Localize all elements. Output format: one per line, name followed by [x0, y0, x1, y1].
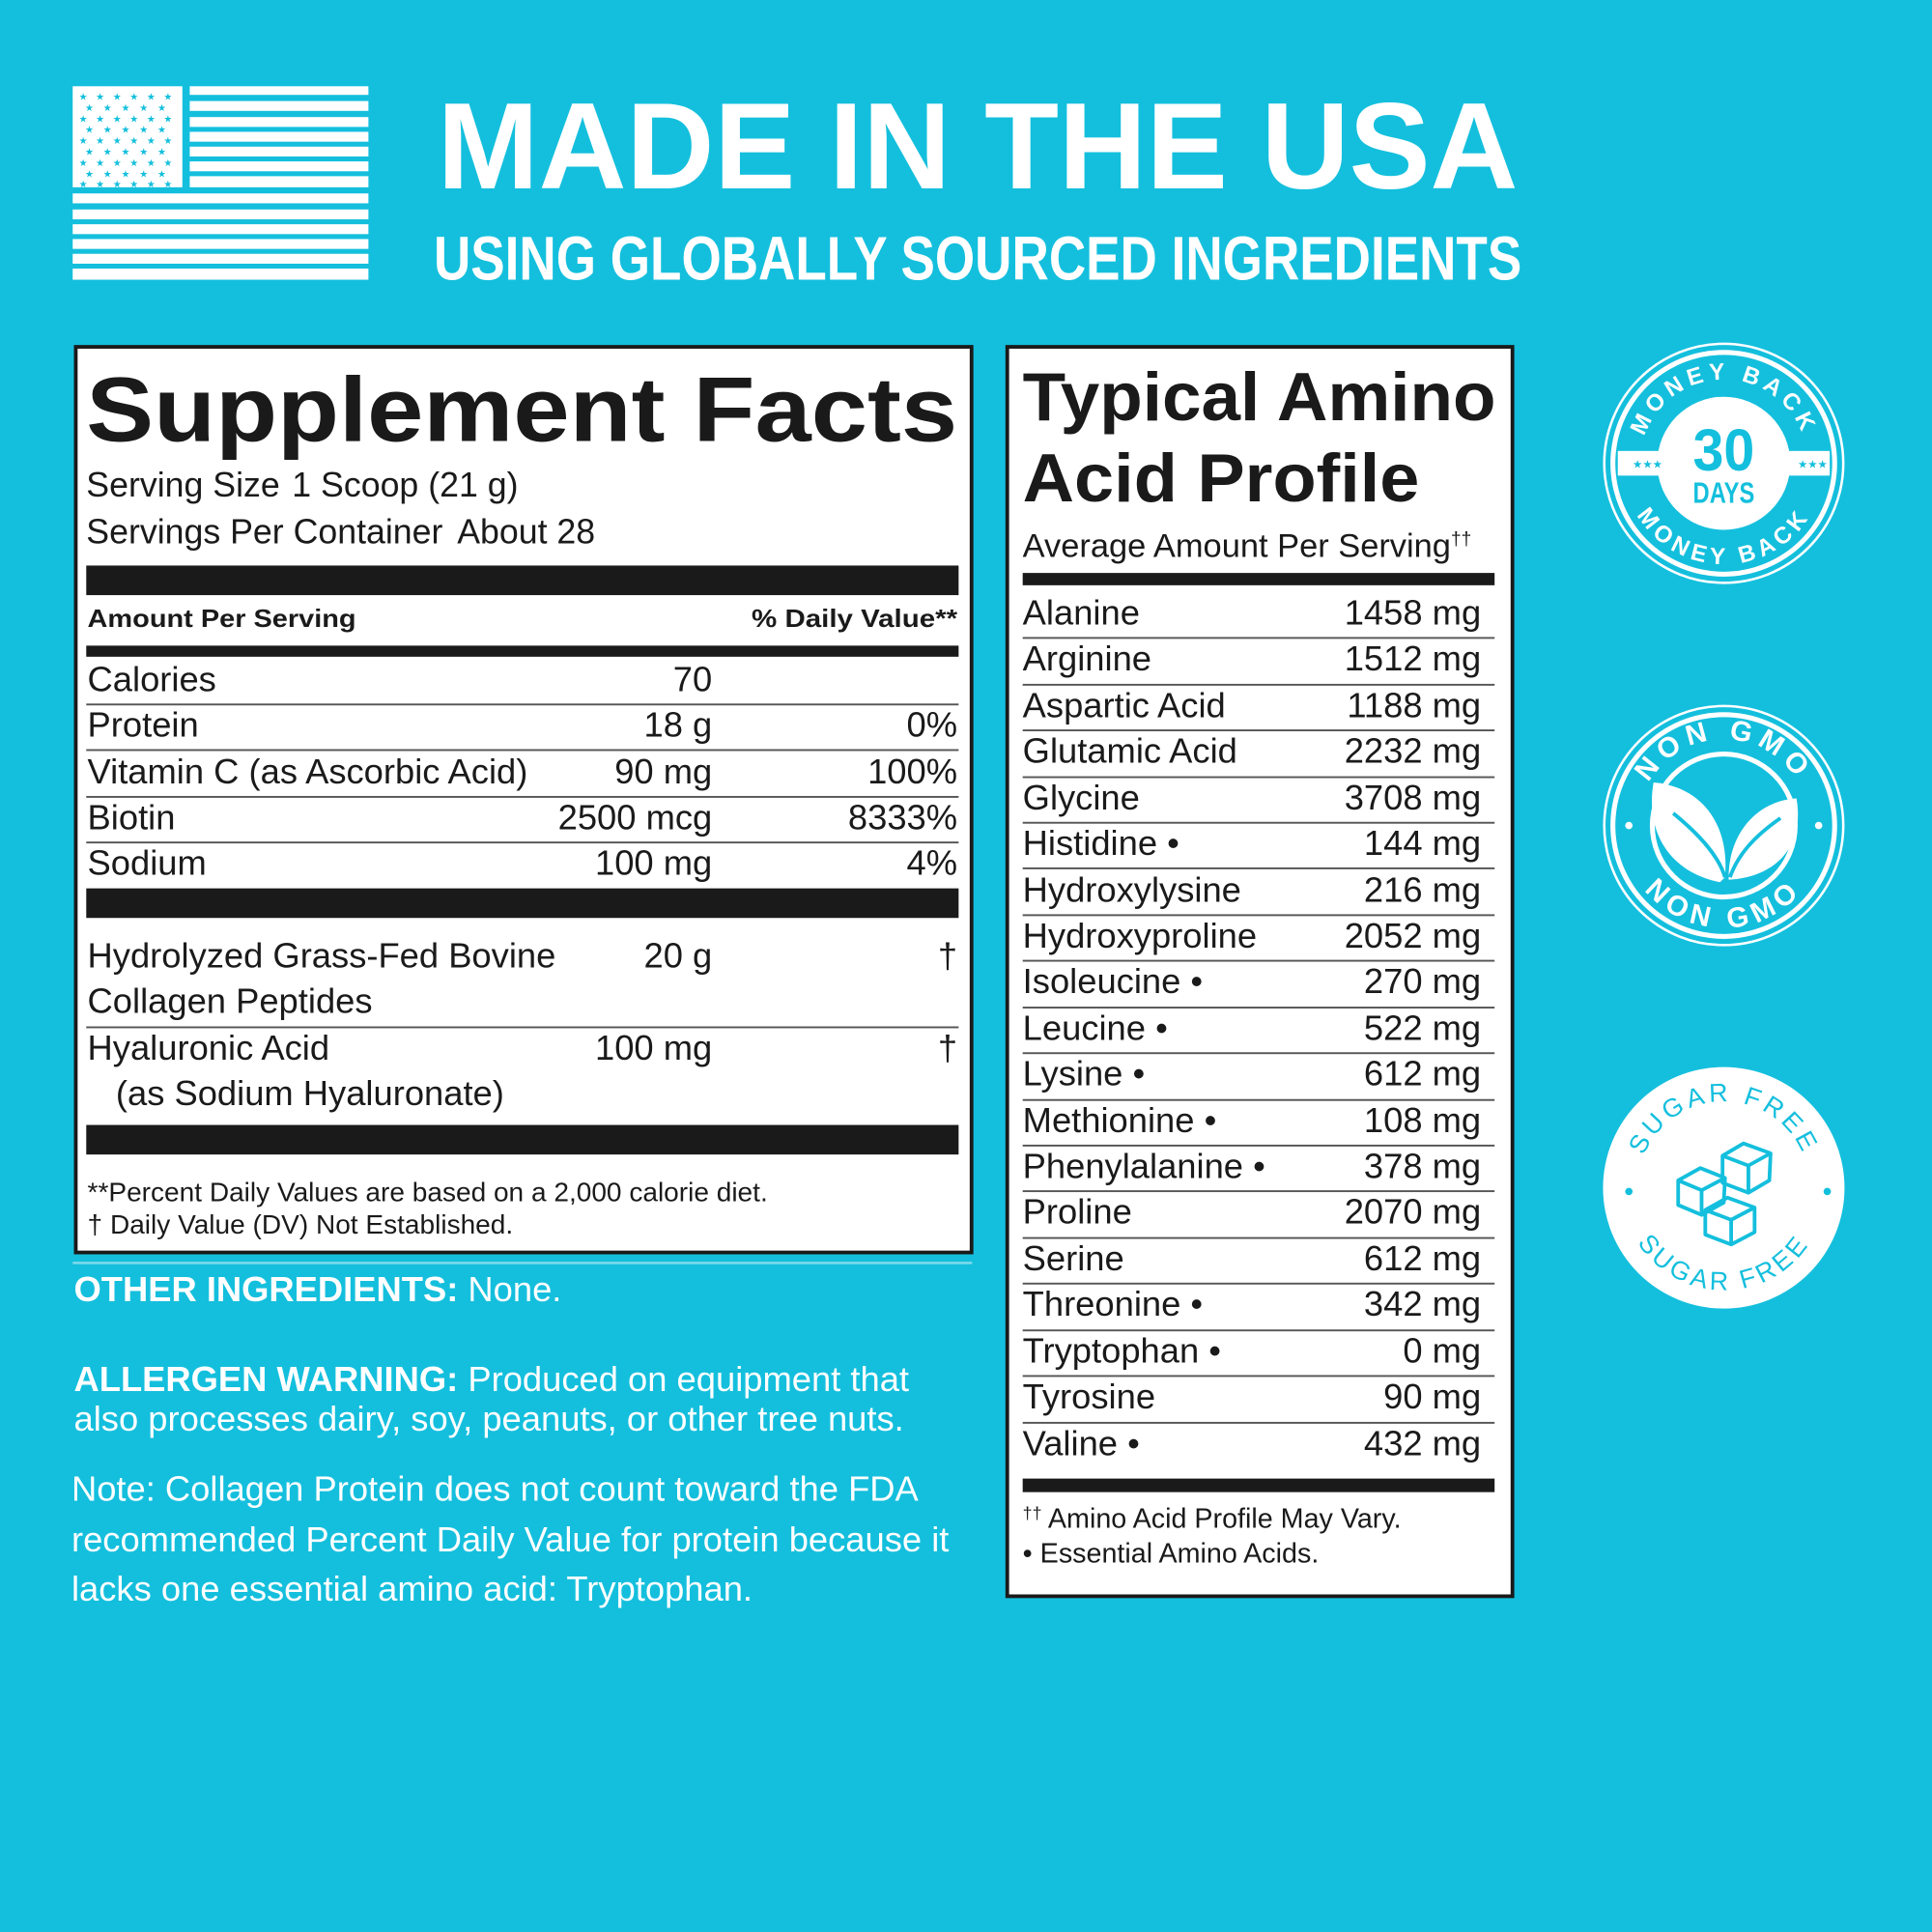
badge: sugar free: SUGAR FREE — [1630, 1084, 1818, 1153]
panel: supplement facts: Servings Per Container — [86, 512, 443, 551]
icon: american flag: ★ ★ ★ ★ ★ ★ — [79, 136, 173, 147]
icon: american flag: ★ ★ ★ ★ ★ — [85, 126, 166, 136]
amino rows: 1512 mg — [1345, 639, 1481, 678]
amino rows: 612 mg — [1364, 1054, 1481, 1094]
nutrient rows: 8333% — [848, 797, 957, 837]
text block: other ingredients & allergen — [74, 1269, 909, 1438]
icon: leaves — [1652, 782, 1725, 882]
amino rows: Proline — [1023, 1192, 1132, 1232]
amino rows: 432 mg — [1364, 1423, 1481, 1463]
panel: amino acid profile — [1008, 347, 1513, 1596]
panel: amino acid profile: †† — [1451, 529, 1471, 550]
badge: 30 days money back: DAYS — [1693, 476, 1754, 509]
nutrient rows: 20 g — [643, 935, 712, 975]
badge: 30 days money back: 30 — [1693, 417, 1754, 483]
badge: 30 days money back — [1603, 342, 1845, 584]
badge: 30 days money back: MONEY BACK — [1636, 506, 1808, 564]
heading: amino profile — [1023, 358, 1495, 516]
icon: american flag: ★ ★ ★ ★ ★ — [85, 170, 166, 181]
amino rows: 2232 mg — [1345, 731, 1481, 771]
nutrient rows: † — [938, 1028, 957, 1067]
amino rows: 216 mg — [1364, 870, 1481, 910]
text block: other ingredients & allergen: ALLERGEN WARNING: Produced on equipment that — [74, 1359, 909, 1399]
icon: sugar cubes — [1678, 1144, 1771, 1244]
heading: amino profile: Acid Profile — [1023, 440, 1419, 516]
text block: note — [71, 1469, 949, 1608]
amino rows — [1023, 593, 1481, 1463]
amino rows: 1458 mg — [1345, 593, 1481, 633]
nutrient rows: 100 mg — [595, 1028, 712, 1067]
icon: american flag: ★ ★ ★ ★ ★ — [85, 103, 166, 114]
text block: note: recommended Percent Daily Value for protein because it — [71, 1520, 949, 1559]
panel: supplement facts: Serving Size — [86, 466, 280, 504]
badge: 30 days money back: ★★★ — [1633, 460, 1662, 471]
amino rows: 612 mg — [1364, 1238, 1481, 1278]
amino rows: 3708 mg — [1345, 778, 1481, 817]
amino rows: Tryptophan • — [1023, 1331, 1221, 1371]
nutrient rows: 2500 mcg — [558, 797, 712, 837]
nutrient rows: 90 mg — [614, 752, 712, 791]
badge: non gmo: NON GMO — [1645, 877, 1795, 927]
icon: american flag: ★ ★ ★ ★ ★ — [85, 148, 166, 158]
amino rows: 270 mg — [1364, 961, 1481, 1001]
panel: supplement facts: About 28 — [457, 512, 595, 551]
panel: supplement facts: 1 Scoop (21 g) — [292, 466, 518, 504]
subtitle: USING GLOBALLY SOURCED INGREDIENTS — [434, 224, 1521, 294]
amino rows: Hydroxyproline — [1023, 916, 1257, 955]
amino rows: 378 mg — [1364, 1146, 1481, 1185]
footnotes: **Percent Daily Values are based on a 2,000 calorie diet. — [88, 1178, 768, 1208]
nutrient rows: Calories — [88, 660, 216, 699]
nutrient rows: 70 — [673, 660, 712, 699]
amino rows: 1188 mg — [1347, 685, 1481, 724]
text block: note: Note: Collagen Protein does not count toward the FDA — [71, 1469, 920, 1509]
text block: note: lacks one essential amino acid: Tryptophan. — [71, 1569, 753, 1608]
amino rows: Serine — [1023, 1238, 1124, 1278]
amino rows: Lysine • — [1023, 1054, 1145, 1094]
amino rows: 522 mg — [1364, 1009, 1481, 1048]
amino rows: 108 mg — [1364, 1100, 1481, 1140]
nutrient rows: Hydrolyzed Grass-Fed Bovine — [88, 935, 555, 975]
text block: other ingredients & allergen: also processes dairy, soy, peanuts, or other tree nuts. — [74, 1399, 904, 1438]
panel: supplement facts — [75, 347, 972, 1253]
heading: amino profile: Typical Amino — [1023, 358, 1495, 435]
badge: sugar free: SUGAR FREE — [1640, 1235, 1808, 1291]
amino rows: 144 mg — [1364, 823, 1481, 863]
amino rows: Valine • — [1023, 1423, 1140, 1463]
icon: american flag: ★ ★ ★ ★ ★ ★ — [79, 114, 173, 125]
badge: non gmo — [1603, 705, 1845, 947]
footnotes — [88, 1178, 768, 1239]
nutrient rows: 4% — [907, 843, 957, 883]
nutrient rows: † — [938, 935, 957, 975]
amino rows: 2070 mg — [1345, 1192, 1481, 1232]
amino rows: 2052 mg — [1345, 916, 1481, 955]
footnotes: † Daily Value (DV) Not Established. — [88, 1209, 513, 1239]
icon: american flag: ★ ★ ★ ★ ★ ★ — [79, 158, 173, 169]
icon: american flag: ★ ★ ★ ★ ★ ★ — [79, 180, 173, 190]
title: MADE IN THE USA — [438, 78, 1518, 215]
badge: 30 days money back: MONEY BACK — [1630, 363, 1816, 435]
nutrient rows: 100 mg — [595, 843, 712, 883]
amino footnotes: †† — [1023, 1504, 1042, 1523]
amino rows: Glutamic Acid — [1023, 731, 1237, 771]
nutrient rows: 0% — [907, 705, 957, 745]
nutrient rows: Biotin — [88, 797, 175, 837]
panel: supplement facts: % Daily Value** — [752, 606, 957, 633]
amino rows: Threonine • — [1023, 1284, 1203, 1323]
amino rows: 342 mg — [1364, 1284, 1481, 1323]
amino rows: 90 mg — [1383, 1377, 1481, 1416]
amino rows: Phenylalanine • — [1023, 1146, 1265, 1185]
amino rows: Arginine — [1023, 639, 1151, 678]
amino rows: Methionine • — [1023, 1100, 1216, 1140]
amino rows: Alanine — [1023, 593, 1140, 633]
nutrient rows: Vitamin C (as Ascorbic Acid) — [88, 752, 527, 791]
amino rows: Histidine • — [1023, 823, 1179, 863]
badge: non gmo: NON GMO — [1634, 721, 1806, 781]
nutrient rows: (as Sodium Hyaluronate) — [116, 1073, 504, 1113]
badge: 30 days money back: ★★★ — [1798, 460, 1828, 471]
amino rows: Hydroxylysine — [1023, 870, 1241, 910]
amino rows: Isoleucine • — [1023, 961, 1203, 1001]
nutrient rows: Collagen Peptides — [88, 980, 373, 1020]
badge: sugar free — [1603, 1066, 1845, 1309]
nutrient rows: 18 g — [643, 705, 712, 745]
amino rows: Tyrosine — [1023, 1377, 1155, 1416]
heading: supplement facts: Supplement Facts — [86, 360, 957, 462]
amino footnotes — [1023, 1504, 1402, 1569]
panel: supplement facts: Amount Per Serving — [88, 606, 356, 633]
nutrient rows — [88, 660, 957, 1113]
icon: american flag: ★ ★ ★ ★ ★ ★ — [79, 92, 173, 102]
panel: amino acid profile: Average Amount Per Serving — [1023, 528, 1451, 565]
nutrient rows: Protein — [88, 705, 199, 745]
amino rows: Glycine — [1023, 778, 1140, 817]
amino rows: Aspartic Acid — [1023, 685, 1226, 724]
amino footnotes: • Essential Amino Acids. — [1023, 1538, 1319, 1569]
icon: american flag — [72, 86, 368, 280]
text block: other ingredients & allergen: OTHER INGREDIENTS: None. — [74, 1269, 561, 1309]
amino rows: Leucine • — [1023, 1009, 1168, 1048]
amino rows: 0 mg — [1403, 1331, 1481, 1371]
nutrient rows: Hyaluronic Acid — [88, 1028, 329, 1067]
nutrient rows: 100% — [867, 752, 957, 791]
amino footnotes: Amino Acid Profile May Vary. — [1042, 1504, 1402, 1535]
nutrient rows: Sodium — [88, 843, 207, 883]
